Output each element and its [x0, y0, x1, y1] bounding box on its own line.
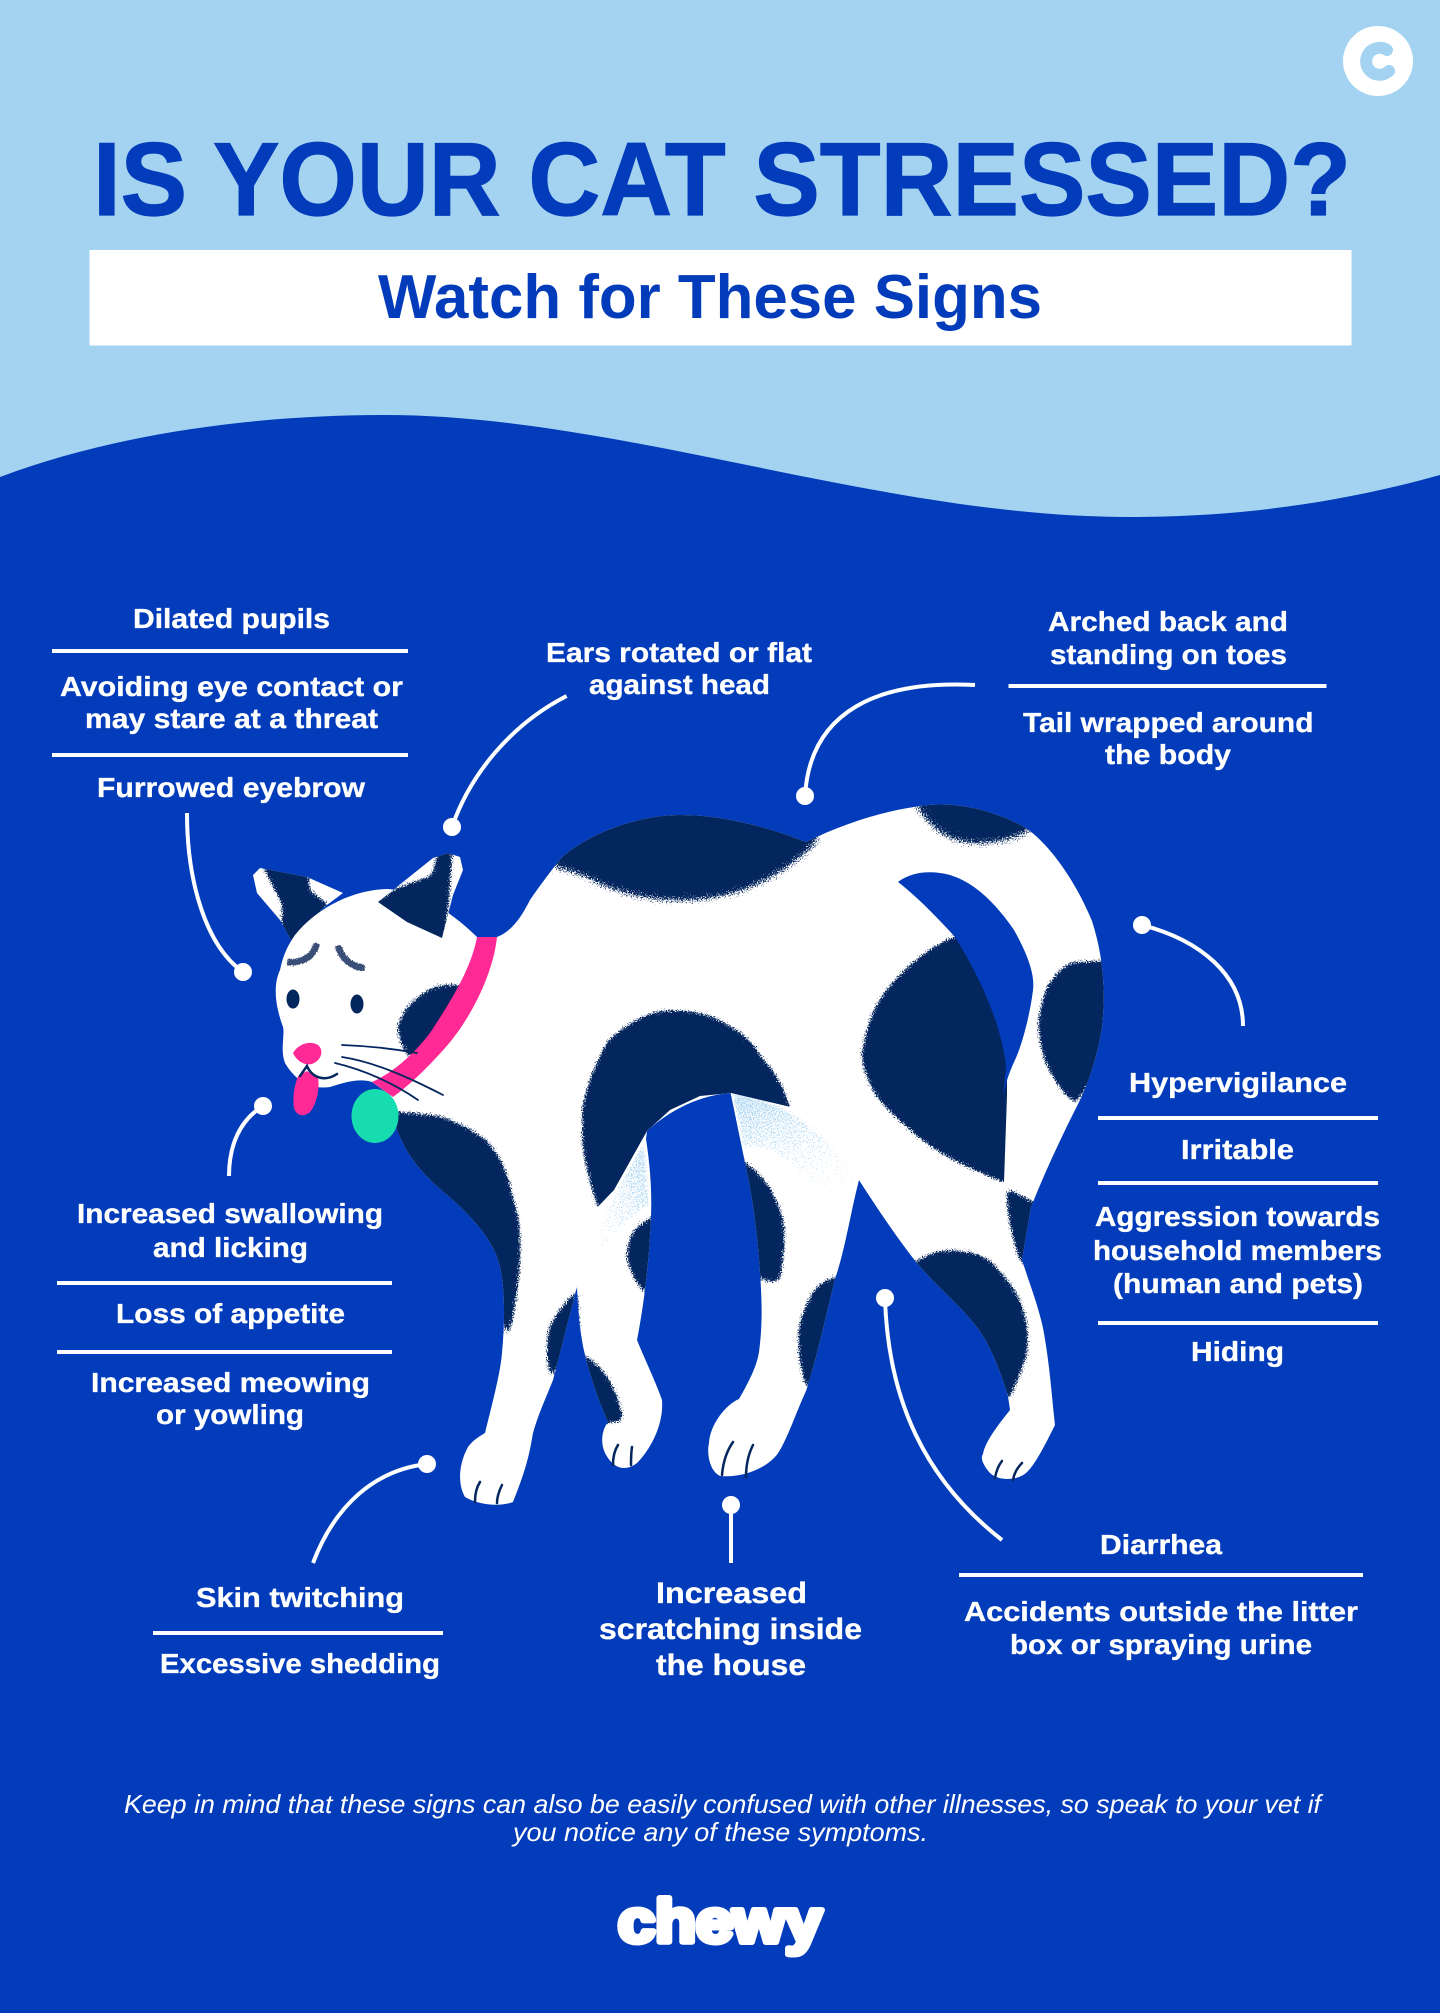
- callout: skin signs: Skin twitching: [196, 1582, 404, 1613]
- callout: eye and brow signs: [52, 603, 408, 803]
- logo: chewy: chewy: [618, 1888, 823, 1955]
- callout: scratching: [599, 1577, 862, 1682]
- callout: scratching: Increased: [656, 1577, 807, 1610]
- callout: scratching: scratching inside: [599, 1613, 862, 1646]
- light blue shaded rear legs: [588, 1094, 854, 1266]
- arrow: behaviour pointer: [1133, 916, 1243, 1026]
- arrow: skin pointer: [313, 1455, 436, 1563]
- illustration: stressed cat: [253, 790, 1120, 1505]
- callout: behaviour signs: [1093, 1067, 1382, 1367]
- callout: eye and brow signs: may stare at a threat: [85, 703, 378, 734]
- cat right ear: [378, 853, 463, 938]
- callout: scratching: the house: [656, 1649, 806, 1682]
- callout: litter box signs: Diarrhea: [1100, 1529, 1222, 1560]
- footnote: [124, 1789, 1324, 1847]
- callout: ears: Ears rotated or flat: [546, 637, 812, 668]
- callout: mouth signs: Increased swallowing: [77, 1198, 383, 1229]
- text: avoiding eye contact: Avoiding eye contact or: [60, 671, 403, 702]
- callout: mouth signs: [57, 1198, 392, 1430]
- callout: litter box signs: [959, 1529, 1363, 1660]
- footnote: Keep in mind that these signs can also be easily confused with other illnesses, so speak to your vet if: [124, 1789, 1324, 1819]
- text: dilated pupils: Dilated pupils: [133, 603, 330, 634]
- subtitle banner: [90, 250, 1352, 346]
- callout: behaviour signs: Aggression towards: [1095, 1201, 1380, 1232]
- paw claws: [475, 1442, 1022, 1503]
- callout: back and tail: the body: [1105, 739, 1231, 770]
- title: IS YOUR CAT STRESSED?: [93, 122, 1351, 238]
- arrow: mouth pointer: [229, 1097, 272, 1176]
- cat body: [276, 805, 1104, 1505]
- pink collar: [372, 937, 497, 1097]
- callout: ears: against head: [589, 669, 770, 700]
- callout: back and tail: Arched back and: [1048, 606, 1288, 637]
- header band: light blue wave: [0, 0, 1440, 517]
- callout: skin signs: Excessive shedding: [160, 1648, 440, 1679]
- callout: mouth signs: or yowling: [156, 1399, 304, 1430]
- callout: mouth signs: Loss of appetite: [116, 1298, 345, 1329]
- callout: back and tail: standing on toes: [1050, 639, 1287, 670]
- callout: skin signs: [153, 1582, 443, 1679]
- dark coat spots: [385, 790, 1120, 1424]
- arrow: ears pointer: [443, 696, 567, 836]
- teal pendant: [352, 1089, 398, 1143]
- callout: back and tail: Tail wrapped around: [1023, 707, 1314, 738]
- cat left ear: [253, 868, 343, 941]
- callout: ears: [546, 637, 812, 700]
- callout: litter box signs: Accidents outside the litter: [964, 1596, 1358, 1627]
- callout: behaviour signs: Irritable: [1181, 1134, 1294, 1165]
- arrow: back pointer: [796, 684, 975, 805]
- callout: litter box signs: box or spraying urine: [1010, 1629, 1312, 1660]
- cat face: [286, 943, 443, 1115]
- callout: behaviour signs: Hiding: [1191, 1336, 1284, 1367]
- callout: mouth signs: Increased meowing: [91, 1367, 370, 1398]
- icon: chewy c badge: [1343, 26, 1413, 96]
- callout: behaviour signs: (human and pets): [1113, 1268, 1363, 1299]
- text: furrowed eyebrow: Furrowed eyebrow: [97, 772, 365, 803]
- arrow: scratching pointer: [722, 1496, 740, 1563]
- arrow: litter box pointer: [876, 1289, 1002, 1540]
- footnote: you notice any of these symptoms.: [511, 1817, 928, 1847]
- arrow: furrowed eyebrow pointer: [187, 813, 252, 981]
- callout: behaviour signs: household members: [1093, 1235, 1382, 1266]
- negative space between tail and hip: [898, 872, 1033, 1100]
- callout: mouth signs: and licking: [153, 1232, 308, 1263]
- callout: back and tail: [1008, 606, 1326, 770]
- subtitle banner: Watch for These Signs: [378, 263, 1042, 332]
- callout: behaviour signs: Hypervigilance: [1129, 1067, 1347, 1098]
